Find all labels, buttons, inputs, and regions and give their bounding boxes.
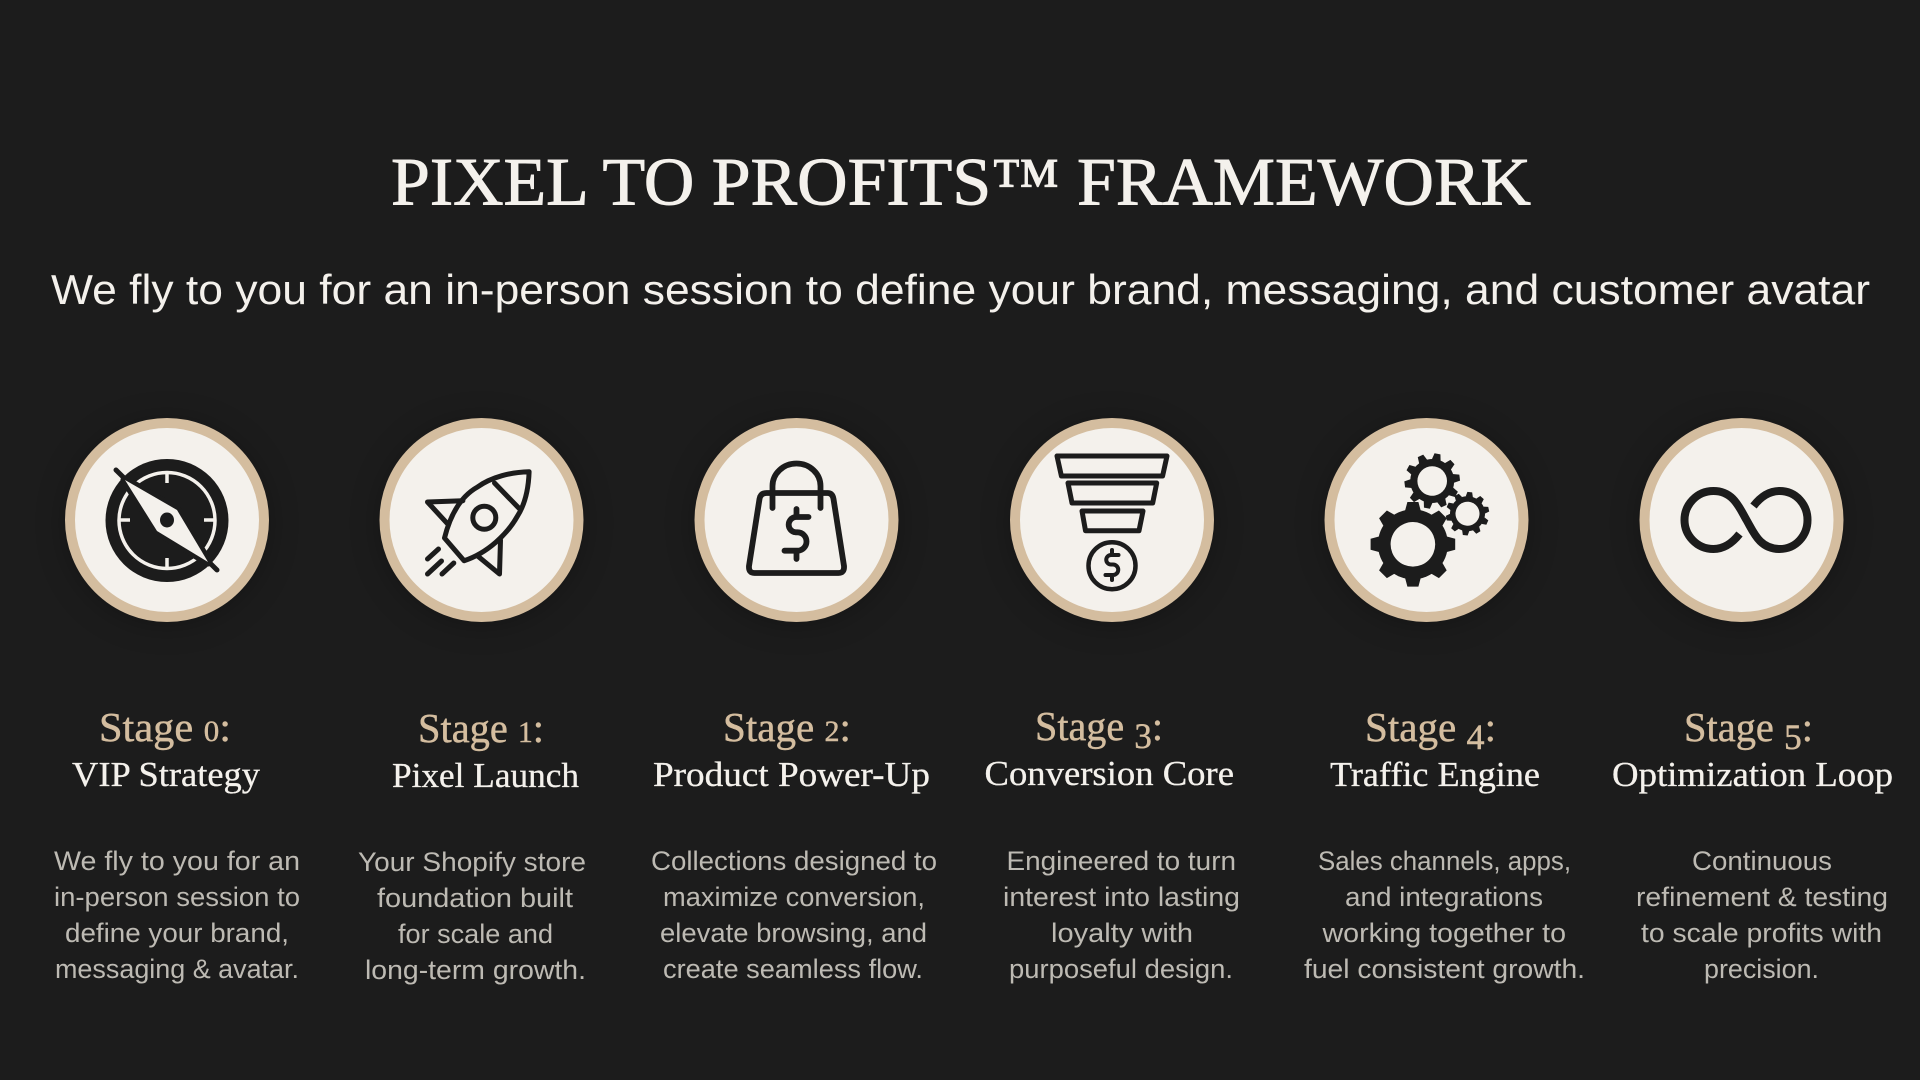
description: foundation built [377, 883, 574, 913]
stage label: Stage [1365, 704, 1456, 750]
icon: rocket [384, 423, 578, 617]
icon: shopping bag [700, 423, 894, 617]
subtitle: We fly to you for an in-person session to define your brand, messaging, and customer avatar [51, 266, 1870, 313]
stage label: 5 [1784, 717, 1802, 757]
description: Your Shopify store [358, 847, 586, 877]
description: and integrations [1345, 882, 1543, 912]
description [54, 846, 300, 984]
description [1636, 846, 1888, 984]
panel: stage 1 [358, 423, 586, 985]
description: refinement & testing [1636, 882, 1888, 912]
description: maximize conversion, [663, 882, 925, 912]
stage name: Product Power-Up [653, 755, 930, 794]
description: Sales channels, apps, [1318, 846, 1571, 876]
stage label: : [1485, 704, 1496, 750]
description: Engineered to turn [1006, 846, 1236, 876]
icon: compass [70, 423, 264, 617]
description: interest into lasting [1003, 882, 1240, 912]
stage label: Stage 0: [99, 704, 231, 750]
description: for scale and [398, 919, 553, 949]
panel: stage 2 [651, 423, 937, 984]
description: Collections designed to [651, 846, 937, 876]
stage label: Stage 1: [418, 705, 544, 751]
stage name: Optimization Loop [1612, 755, 1893, 794]
description [1304, 846, 1585, 984]
description [1003, 846, 1240, 984]
description: We fly to you for an [54, 846, 300, 876]
icon: funnel [1015, 423, 1209, 617]
stage label: 4 [1467, 717, 1485, 757]
stage label: Stage [1035, 703, 1126, 749]
description [358, 847, 586, 985]
stage name: Traffic Engine [1330, 755, 1540, 794]
icon: gears [1330, 423, 1524, 617]
stage label: 3 [1134, 716, 1152, 756]
description: loyalty with [1051, 918, 1193, 948]
title: PIXEL TO PROFITS™ FRAMEWORK [391, 144, 1531, 220]
stage name: VIP Strategy [72, 755, 261, 794]
stage label: Stage [1684, 704, 1775, 750]
description: fuel consistent growth. [1304, 954, 1585, 984]
panel: stage 0 [54, 423, 300, 984]
description: long-term growth. [365, 955, 586, 985]
description: to scale profits with [1641, 918, 1882, 948]
stage name: Conversion Core [984, 754, 1234, 793]
description: messaging & avatar. [55, 954, 299, 984]
description: elevate browsing, and [660, 918, 927, 948]
description: define your brand, [65, 918, 289, 948]
description: create seamless flow. [663, 954, 923, 984]
stage label: Stage 2: [723, 704, 851, 750]
panel: stage 5 [1612, 423, 1893, 984]
panel: stage 3 [984, 423, 1240, 984]
description: purposeful design. [1009, 954, 1233, 984]
icon: infinity loop [1644, 423, 1838, 617]
panel: stage 4 [1304, 423, 1585, 984]
description: precision. [1704, 954, 1819, 984]
description [651, 846, 937, 984]
description: in-person session to [54, 882, 300, 912]
stage label: : [1152, 703, 1163, 749]
description: working together to [1321, 918, 1566, 948]
description: Continuous [1692, 846, 1832, 876]
stage label: : [1802, 704, 1813, 750]
stage name: Pixel Launch [392, 756, 579, 795]
